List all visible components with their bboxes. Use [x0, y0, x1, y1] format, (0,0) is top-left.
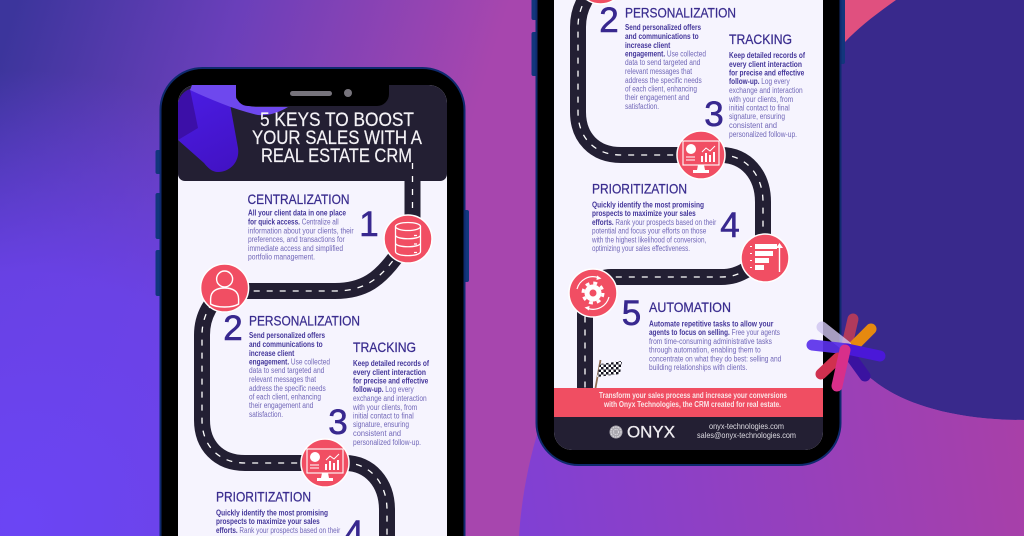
icon: onyx logo [610, 426, 622, 438]
step 3: tracking: exchange and interaction [729, 86, 803, 95]
header band [178, 85, 447, 181]
step 2: personalization: PERSONALIZATION [625, 5, 736, 21]
step 2: personalization: address the specific needs [249, 384, 326, 393]
icon: monitor with charts [677, 131, 725, 179]
step 3: tracking: personalized follow-up. [353, 438, 421, 447]
step 3: tracking: signature, ensuring [729, 112, 785, 121]
step 2: personalization: increase client [625, 41, 671, 50]
step 2: personalization: increase client [249, 349, 295, 358]
step 2: personalization: satisfaction. [625, 102, 659, 111]
step 2: personalization [223, 309, 360, 419]
step 3: tracking: for precise and effective [729, 68, 805, 78]
call to action banner: with Onyx Technologies, the CRM created for real estate. [603, 400, 781, 409]
step 5: automation: building relationships with clients. [649, 363, 747, 372]
icon: gear with arrows [569, 269, 617, 317]
step 3: tracking [328, 339, 429, 447]
step 3: tracking: every client interaction [729, 60, 802, 69]
step 3: tracking: initial contact to final [353, 412, 414, 420]
step 3: tracking: with your clients, from [728, 95, 793, 104]
step 2: personalization: and communications to [249, 340, 323, 349]
step 2: personalization: address the specific needs [625, 76, 702, 85]
icon: colorful star logo [812, 319, 880, 386]
step 2: personalization: their engagement and [625, 93, 689, 102]
step 3: tracking: Keep detailed records of [353, 359, 429, 368]
step 2: personalization: Send personalized offers [249, 331, 326, 340]
step 3: tracking [704, 31, 805, 139]
step 2: personalization: satisfaction. [249, 410, 283, 419]
step 2: personalization: relevant messages that [249, 375, 317, 384]
step 1: centralization: preferences, and transactions for [248, 235, 345, 244]
step 1: centralization [248, 191, 379, 262]
step 3: tracking: exchange and interaction [353, 394, 427, 403]
notch [236, 80, 389, 106]
step 3: tracking: initial contact to final [729, 104, 790, 112]
step 2: personalization: data to send targeted and [625, 58, 700, 67]
road [202, 163, 412, 536]
step 3: tracking: consistent and [353, 429, 401, 438]
step 2: personalization: their engagement and [249, 401, 313, 410]
footer [554, 417, 823, 450]
step 4: prioritization: prospects to maximize your sales [592, 209, 696, 218]
phone 1 [156, 68, 469, 536]
phone 2 [532, 0, 845, 465]
step 3: tracking: with your clients, from [352, 403, 417, 412]
step 4: prioritization: 4 [720, 206, 740, 245]
step 1: centralization: for quick access. Centralize all [248, 218, 339, 226]
step 2: personalization: engagement. Use collected [249, 358, 330, 366]
step 4: prioritization: with the highest likelihood of conversion, [591, 236, 706, 244]
step 1: centralization: 1 [359, 205, 379, 244]
footer: onyx-technologies.com [709, 422, 784, 431]
step 4: prioritization (start): efforts. Rank your prospects based on their [216, 526, 341, 535]
phone 2 road [578, 0, 788, 388]
step 2: personalization: engagement. Use collected [625, 50, 706, 58]
step 4: prioritization: optimizing your sales effectiveness. [592, 244, 690, 253]
step 4: prioritization: potential and focus your efforts on those [592, 227, 706, 236]
step 1: centralization: All your client data in one place [248, 209, 347, 218]
step 3: tracking: every client interaction [353, 368, 426, 377]
step 5: automation: through automation, enabling them to [649, 346, 761, 354]
icon: person (partial) [577, 0, 625, 4]
step 2: personalization: Send personalized offers [625, 23, 702, 32]
step 4: prioritization (start): PRIORITIZATION [216, 489, 311, 505]
step 2: personalization: of each client, enhancing [249, 392, 321, 402]
step 5: automation: AUTOMATION [649, 299, 731, 315]
title: 5 KEYS TO BOOST [260, 109, 414, 131]
step 5: automation: 5 [622, 294, 641, 333]
phone 1 screen [178, 85, 447, 536]
step 2: personalization: of each client, enhancing [625, 84, 697, 94]
call to action banner: Transform your sales process and increase your conversions [599, 391, 788, 400]
step 4: prioritization [591, 181, 740, 253]
step 4: prioritization: Quickly identify the most promising [592, 200, 704, 209]
icon: person [201, 264, 249, 312]
step 2: personalization: and communications to [625, 32, 699, 41]
footer: ONYX [627, 424, 675, 442]
phone 2 screen [554, 0, 823, 450]
step 5: automation: agents to focus on selling. Free your agents [649, 328, 780, 337]
step 4: prioritization (start) [216, 489, 364, 536]
title [252, 109, 422, 167]
title: YOUR SALES WITH A [252, 127, 422, 149]
step 2: personalization: relevant messages that [625, 67, 693, 76]
phone 1 body [160, 68, 464, 536]
step 3: tracking: for precise and effective [353, 376, 429, 386]
step 2: personalization: PERSONALIZATION [249, 313, 360, 329]
step 1: centralization: information about your clients, their [248, 226, 354, 235]
step 3: tracking: follow-up. Log every [353, 385, 414, 394]
step 3: tracking: signature, ensuring [353, 420, 409, 429]
icon: funnel bars with arrow [741, 234, 789, 282]
step 5: automation: from time-consuming administrative tasks [649, 337, 772, 346]
step 3: tracking: Keep detailed records of [729, 51, 805, 60]
step 2: personalization [599, 1, 736, 111]
step 1: centralization: immediate access and simplified [248, 244, 343, 253]
phone 1 side buttons [156, 150, 469, 296]
step 5: automation [622, 294, 781, 372]
step 1: centralization: portfolio management. [248, 253, 315, 262]
footer: sales@onyx-technologies.com [697, 431, 796, 440]
header purple shape [178, 85, 288, 172]
icon: database [384, 215, 432, 263]
step 3: tracking: consistent and [729, 121, 777, 130]
phone 2 side buttons [532, 0, 845, 76]
step 2: personalization: 2 [223, 309, 243, 348]
icon: checkered flag [596, 360, 622, 388]
step 3: tracking: personalized follow-up. [729, 130, 797, 139]
title: REAL ESTATE CRM [261, 145, 412, 167]
step 4: prioritization (start): Quickly identify the most promising [216, 508, 328, 517]
step 2: personalization: 2 [599, 1, 619, 40]
step 5: automation: concentrate on what they do best: selling and [649, 354, 781, 364]
call to action banner [554, 388, 823, 417]
step 4: prioritization: efforts. Rank your prospects based on their [592, 218, 717, 227]
step 3: tracking: 3 [704, 95, 724, 134]
step 5: automation: Automate repetitive tasks to allow your [649, 320, 773, 328]
step 1: centralization: CENTRALIZATION [248, 191, 350, 207]
step 2: personalization: data to send targeted and [249, 366, 324, 375]
step 3: tracking: follow-up. Log every [729, 77, 790, 86]
phone 2 body [536, 0, 840, 465]
icon: monitor with charts [301, 439, 349, 487]
step 4: prioritization (start): prospects to maximize your sales [216, 517, 320, 526]
step 4: prioritization: PRIORITIZATION [592, 181, 687, 197]
step 3: tracking: TRACKING [729, 31, 792, 47]
step 3: tracking: 3 [328, 403, 348, 442]
step 3: tracking: TRACKING [353, 339, 416, 355]
